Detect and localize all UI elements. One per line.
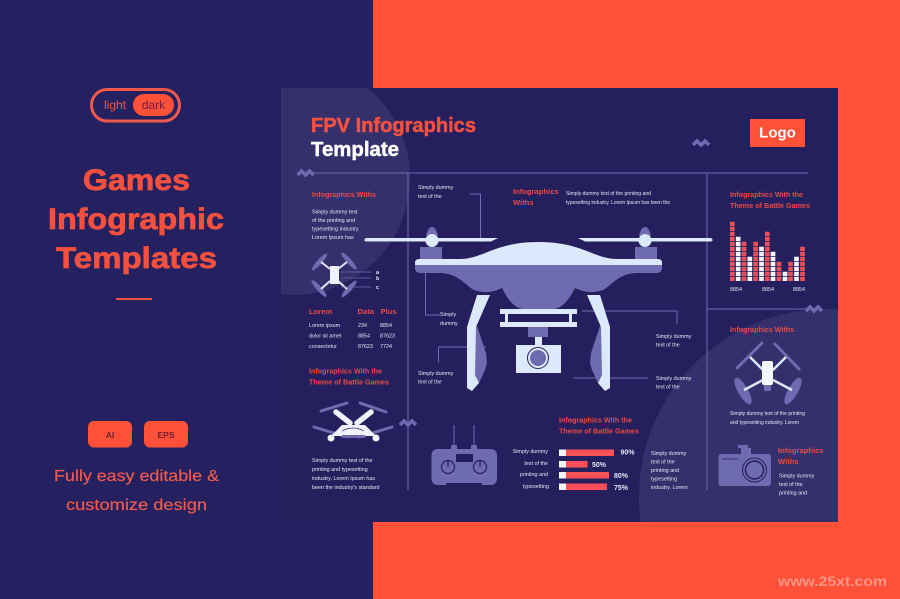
toggle: light dark [92,90,180,121]
format badges: AI [106,430,114,440]
progress bars block: Simply dummy [513,449,548,455]
logo box: Logo [759,124,796,142]
callout labels around drone: Simply dummy [656,376,692,382]
text block: bars: Simply dummy [651,451,687,457]
format badges [88,421,188,448]
block: top-view drone right [730,325,805,426]
callout labels around drone: Simply dummy [418,371,454,377]
layout dividers [297,173,808,490]
tagline [54,468,219,514]
tagline: Fully easy editable & [54,468,219,485]
gimbal frame [500,309,577,327]
leader lines [426,194,677,378]
text block: quadcopter: industry. Lorem Ipsum has [312,476,375,482]
block: top-view drone right: and typesetting industry. Lorem [730,420,799,426]
watermark: www.25xt.com [777,573,887,589]
icon: quadcopter [314,403,392,442]
block: infographics withs top left: Lorem Ipsum has [312,235,354,241]
bar chart block: 8854 [762,287,774,293]
block: infographics withs top left: typesetting industry. [312,226,360,232]
data table: 8854 [358,334,370,340]
icon: remote controller [432,425,497,486]
callout labels around drone: text of the [418,380,442,386]
data table: 7724 [380,344,392,350]
panel heading [311,115,476,161]
block: infographics withs bottom right [778,446,824,496]
icon: main drone [364,227,713,391]
toggle: light dark: light [104,98,127,112]
progress bars block: printing and [520,472,548,478]
bar chart block [730,190,810,293]
callout labels around drone: text of the [418,194,442,200]
callout labels around drone [418,185,692,390]
data table: 234 [358,323,367,329]
right orange background [373,0,900,599]
tagline: customize design [66,497,207,514]
data table: Plus [380,307,397,316]
progress bars block: 75% [614,485,629,492]
format badges: EPS [157,430,175,440]
progress bars block: 90% [620,450,635,456]
progress bars block: text of the [524,461,548,467]
main title: Infographic [48,203,224,236]
progress bars block: typesetting [523,484,549,490]
data table: consectetur [309,344,337,350]
logo box [750,119,805,147]
zigzag marks [298,141,822,425]
callout labels around drone: dummy [440,321,458,327]
text block: bars: printing and [651,468,679,474]
callout labels around drone: text of the [656,342,680,348]
progress bars block: Infographics With the [559,416,632,424]
data table: 8854 [380,323,392,329]
data table: 87623 [380,334,395,340]
data table: 87623 [358,344,373,350]
progress bars block [513,416,639,492]
text block: quadcopter: printing and typesetting [312,467,368,473]
block: infographics withs bottom right: text of the [779,482,803,488]
propellers [364,227,713,260]
block: infographics withs bottom right: printing and [779,490,807,496]
bar chart block: 8854 [730,287,742,293]
panel: infographic board [281,88,838,522]
text block: bars: text of the [651,460,675,466]
text block: bars: typesetting [651,476,677,482]
callout labels around drone: Simply [440,312,456,318]
progress bars block: 50% [592,462,607,469]
camera [516,345,561,373]
heading: battle games left [309,366,389,386]
data table: dolor sit amet [309,334,342,340]
main title: Games [83,164,190,197]
block: infographics withs bottom right: Simply dummy [779,474,815,480]
icon: camera [718,445,771,486]
block: infographics withs top left: of the printing and [312,218,355,224]
main title: Templates [56,242,217,275]
data table [309,307,397,350]
heading: battle games left: Infographics With the [309,366,382,376]
block: infographics withs top center: Infographics [513,187,559,196]
callout labels around drone: Simply dummy [656,334,692,340]
text block: quadcopter [312,458,380,491]
icon: small top-view drone [310,251,380,299]
text block: bars [651,451,688,491]
progress bars block: Theme of Battle Games [559,426,639,436]
data table: Lorem [309,307,332,316]
block: top-view drone right: Simply dummy text of the printing [730,411,805,417]
body [415,264,662,309]
data table: Lorem ipsum [309,323,341,329]
block: infographics withs top left: Simply dummy text [312,210,358,216]
text block: quadcopter: Simply dummy text of the [312,458,373,464]
panel heading: FPV Infographics [311,115,476,137]
block: infographics withs top left [312,190,376,241]
text block: bars: industry. Lorem [651,485,688,491]
left background [0,0,373,599]
block: infographics withs top center [513,187,670,207]
icon: small top-view drone: c [376,285,379,291]
callout labels around drone: text of the [656,384,680,390]
block: infographics withs top center: typesetting industry. Lorem Ipsum has been the [566,200,670,206]
block: infographics withs top center: Simply dummy text of the printing and [566,191,651,197]
toggle: light dark: dark [142,98,166,112]
bar chart block: Infographics With the [730,190,803,199]
title underline [116,298,152,300]
panel heading: Template [311,139,399,161]
icon: small top-view drone: b [376,276,380,282]
block: top-view drone right: Infographics Withs [730,325,794,334]
text block: quadcopter: been the industry's standard [312,485,380,491]
block: infographics withs bottom right: Withs [778,457,799,466]
main title [48,164,224,275]
callout labels around drone: Simply dummy [418,185,454,191]
progress bars block: 80% [614,473,629,480]
block: infographics withs bottom right: Infographics [778,446,824,455]
bar chart block: Theme of Battle Games [730,201,810,210]
data table: Data [358,307,375,316]
heading: battle games left: Theme of Battle Games [309,378,389,386]
bar chart block: 8854 [793,287,805,293]
block: infographics withs top center: Withs [513,198,534,207]
landing legs [474,320,487,383]
block: infographics withs top left: Infographics Withs [312,190,376,199]
icon: small top-view drone: a [376,270,380,276]
